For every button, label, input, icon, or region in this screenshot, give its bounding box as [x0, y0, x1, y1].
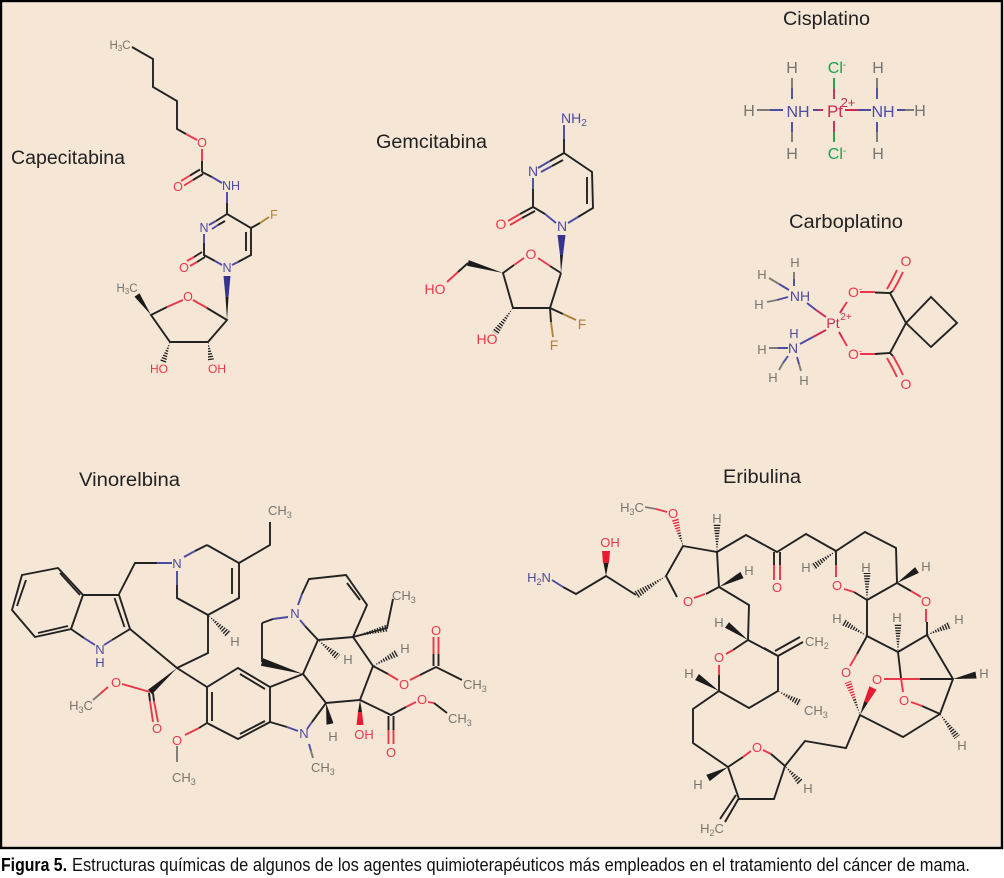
molecule: carboplatino: [754, 253, 957, 392]
atom labels: H: [116, 283, 125, 295]
atom labels: O: [173, 180, 183, 194]
atom labels: O: [899, 693, 909, 708]
atom labels: Pt: [826, 315, 840, 331]
atom labels: H: [693, 777, 703, 792]
atom labels: H: [789, 326, 799, 341]
atom labels: OH: [600, 535, 620, 550]
atom labels: O: [526, 246, 537, 262]
atom labels: H: [714, 615, 724, 630]
atom labels: NH: [790, 288, 810, 304]
heading: Carboplatino: Carboplatino: [789, 212, 903, 233]
atom labels: C: [129, 283, 138, 295]
atom labels: H: [230, 634, 240, 649]
atom labels: -: [843, 60, 846, 71]
bonds: [757, 78, 914, 142]
atom labels: N: [290, 606, 300, 621]
atom labels: H: [109, 40, 118, 52]
caption: Figura 5.: [1, 855, 67, 875]
atom labels: H: [790, 255, 800, 270]
molecule: cisplatino: [743, 60, 926, 163]
atom labels: O: [901, 253, 912, 269]
atom labels: CH: [804, 703, 823, 718]
atom labels: OH: [208, 362, 226, 376]
atom labels: O: [752, 740, 762, 755]
atom labels: 3: [330, 767, 335, 777]
stereo bonds: [467, 235, 566, 335]
atom labels: -: [843, 146, 846, 157]
atom labels: N: [199, 221, 209, 235]
atom labels: H: [754, 297, 764, 312]
atom labels: H: [799, 373, 809, 388]
bonds: [447, 125, 593, 337]
atom labels: F: [578, 316, 586, 332]
atom labels: F: [270, 208, 278, 222]
atom labels: H: [712, 511, 722, 526]
atom labels: CH: [311, 760, 330, 775]
atom labels: C: [122, 40, 131, 52]
atom labels: 3: [125, 287, 130, 296]
stereo bonds: [134, 276, 230, 363]
heading: Vinorelbina: Vinorelbina: [79, 470, 180, 491]
atom labels: O: [399, 677, 409, 692]
atom labels: H: [832, 611, 842, 626]
atom labels: NH: [561, 110, 581, 126]
atom labels: H: [620, 500, 629, 515]
atom labels: H: [786, 146, 798, 163]
molecule: gemcitabina: [424, 110, 593, 353]
atom labels: H: [527, 570, 536, 585]
atom labels: C: [715, 821, 724, 836]
atom labels: 3: [482, 684, 487, 694]
atom labels: H: [69, 698, 78, 713]
atom labels: CH: [805, 634, 824, 649]
atom labels: NH: [222, 179, 240, 193]
atom labels: OH: [354, 727, 374, 742]
atom labels: HO: [150, 362, 168, 376]
atom labels: O: [841, 665, 851, 680]
atom labels: H: [957, 738, 967, 753]
atom labels: 3: [467, 718, 472, 728]
atom labels: O: [832, 578, 842, 593]
stereo bonds: [148, 615, 399, 725]
atom labels: O: [152, 721, 162, 736]
atom labels: CH: [392, 588, 411, 603]
atom labels: [527, 500, 989, 838]
atom labels: O: [496, 216, 507, 232]
atom labels: -: [859, 346, 862, 356]
atom labels: Cl: [828, 60, 843, 77]
atom labels: H: [95, 655, 105, 670]
atom labels: H: [328, 729, 338, 744]
atom labels: N: [172, 556, 182, 571]
atom labels: [754, 253, 912, 392]
atom labels: H: [743, 103, 755, 120]
atom labels: H: [979, 666, 989, 681]
atom labels: [743, 60, 926, 163]
atom labels: 2: [709, 828, 715, 838]
atom labels: CH: [172, 770, 191, 785]
atom labels: CH: [448, 711, 467, 726]
atom labels: H: [801, 560, 811, 575]
bonds: [552, 507, 953, 822]
atom labels: NH: [871, 104, 895, 121]
atom labels: O: [197, 136, 207, 150]
bonds: [12, 522, 462, 762]
atom labels: N: [222, 261, 232, 275]
atom labels: H: [768, 370, 778, 385]
atom labels: O: [111, 675, 121, 690]
atom labels: CH: [463, 677, 482, 692]
atom labels: O: [683, 594, 693, 609]
atom labels: C: [635, 500, 644, 515]
molecule: vinorelbina: [12, 503, 487, 787]
atom labels: HO: [476, 331, 498, 347]
atom labels: H: [872, 146, 884, 163]
molecule: eribulina: [527, 500, 989, 838]
atom labels: H: [744, 563, 754, 578]
atom labels: NH: [786, 104, 810, 121]
atom labels: 3: [78, 705, 84, 715]
atom labels: [424, 110, 587, 353]
heading: Eribulina: Eribulina: [723, 467, 801, 488]
atom labels: -: [859, 284, 862, 294]
atom labels: H: [861, 560, 871, 575]
atom labels: H: [757, 342, 767, 357]
heading: Capecitabina: Capecitabina: [11, 148, 125, 169]
atom labels: 3: [287, 510, 292, 520]
atom labels: H: [921, 559, 931, 574]
atom labels: O: [872, 672, 882, 687]
atom labels: O: [431, 623, 441, 638]
atom labels: O: [901, 376, 912, 392]
atom labels: H: [872, 60, 884, 77]
atom labels: H: [400, 641, 410, 656]
atom labels: O: [386, 745, 396, 760]
atom labels: N: [557, 218, 567, 234]
atom labels: HO: [424, 281, 446, 297]
atom labels: O: [714, 650, 724, 665]
stereo bonds: [602, 518, 977, 784]
atom labels: Pt: [827, 102, 843, 121]
atom labels: H: [684, 666, 694, 681]
atom labels: H: [954, 612, 964, 627]
atom labels: N: [542, 570, 551, 585]
atom labels: O: [417, 692, 427, 707]
atom labels: O: [183, 290, 193, 304]
atom labels: 2+: [840, 312, 852, 323]
atom labels: 2: [581, 118, 587, 129]
atom labels: O: [848, 346, 859, 362]
atom labels: H: [892, 610, 902, 625]
atom labels: C: [84, 698, 93, 713]
atom labels: [69, 503, 487, 787]
bonds: [767, 270, 957, 377]
atom labels: H: [786, 60, 798, 77]
atom labels: 2+: [841, 95, 855, 110]
atom labels: N: [95, 642, 105, 657]
atom labels: H: [700, 821, 709, 836]
atom labels: N: [788, 340, 798, 356]
atom labels: 3: [629, 507, 635, 517]
molecule: capecitabina: [109, 40, 278, 376]
atom labels: O: [179, 261, 189, 275]
atom labels: H: [757, 267, 767, 282]
atom labels: H: [914, 103, 926, 120]
atom labels: H: [803, 781, 813, 796]
heading: Cisplatino: Cisplatino: [783, 9, 870, 30]
atom labels: 2: [536, 577, 542, 587]
heading: Gemcitabina: Gemcitabina: [376, 132, 487, 153]
atom labels: F: [550, 337, 558, 353]
atom labels: CH: [268, 503, 287, 518]
bonds: [132, 47, 269, 342]
atom labels: H: [343, 652, 353, 667]
atom labels: [109, 40, 278, 376]
atom labels: N: [528, 163, 538, 179]
atom labels: 2: [824, 641, 829, 651]
atom labels: 3: [411, 595, 416, 605]
atom labels: O: [921, 594, 931, 609]
atom labels: N: [299, 726, 309, 741]
atom labels: O: [772, 580, 782, 595]
atom labels: O: [172, 733, 182, 748]
atom labels: 3: [823, 710, 828, 720]
atom labels: O: [668, 506, 678, 521]
atom labels: 3: [191, 777, 196, 787]
atom labels: 3: [118, 44, 123, 53]
atom labels: O: [848, 284, 859, 300]
atom labels: Cl: [828, 146, 843, 163]
